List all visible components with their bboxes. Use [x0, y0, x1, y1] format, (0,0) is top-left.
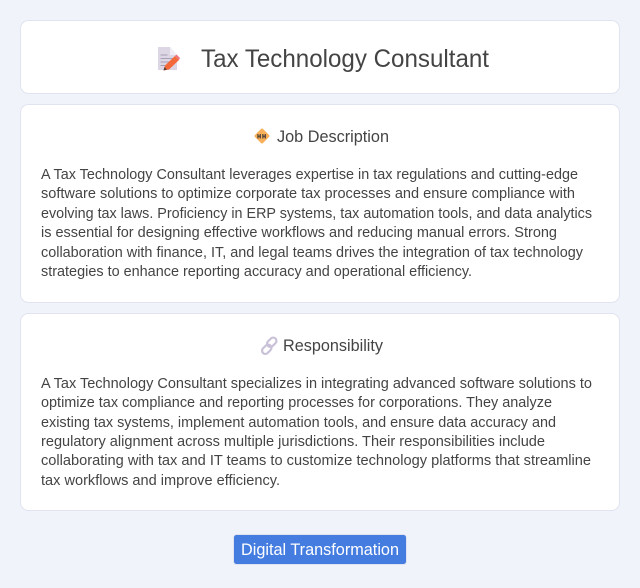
- job description text: collaboration with finance, IT, and legal teams drives the integration of tax technology: [41, 245, 584, 261]
- responsibility text: tax workflows and improve efficiency.: [41, 473, 280, 489]
- job description text: [41, 167, 592, 280]
- responsibility text: [41, 376, 592, 489]
- icon: orange diamond: [254, 128, 270, 144]
- responsibility text: optimize tax compliance and reporting processes for corporations. They analyze: [41, 395, 552, 411]
- heading: job description: Job Description: [277, 128, 389, 146]
- button: digital transformation: Digital Transformation: [241, 541, 399, 559]
- title text: Tax Technology Consultant: [201, 45, 489, 73]
- heading: responsibility: Responsibility: [283, 337, 384, 355]
- responsibility text: A Tax Technology Consultant specializes in integrating advanced software solutions to: [41, 376, 592, 392]
- icon: document with pencil: [158, 47, 180, 70]
- job description text: strategies to enhance reporting accuracy and operational efficiency.: [41, 264, 472, 280]
- responsibility text: regulatory alignment across multiple jurisdictions. Their responsibilities include: [41, 434, 545, 450]
- job description text: A Tax Technology Consultant leverages expertise in tax regulations and cutting-edge: [41, 167, 578, 183]
- button: digital transformation: [234, 534, 406, 564]
- panel: title: [20, 20, 620, 94]
- job description text: is essential for designing effective workflows and reducing manual errors. Strong: [41, 225, 557, 241]
- responsibility text: existing tax systems, implement automation tools, and ensure data accuracy and: [41, 415, 556, 431]
- job description text: evolving tax laws. Proficiency in ERP systems, tax automation tools, and data analytics: [41, 206, 592, 222]
- panel: responsibility: [20, 314, 620, 510]
- panel: job description: [20, 104, 620, 302]
- responsibility text: collaborating with tax and IT teams to customize technology platforms that streamline: [41, 453, 591, 469]
- job description text: software solutions to optimize corporate tax processes and ensure compliance with: [41, 186, 575, 202]
- icon: chain link: [261, 336, 278, 355]
